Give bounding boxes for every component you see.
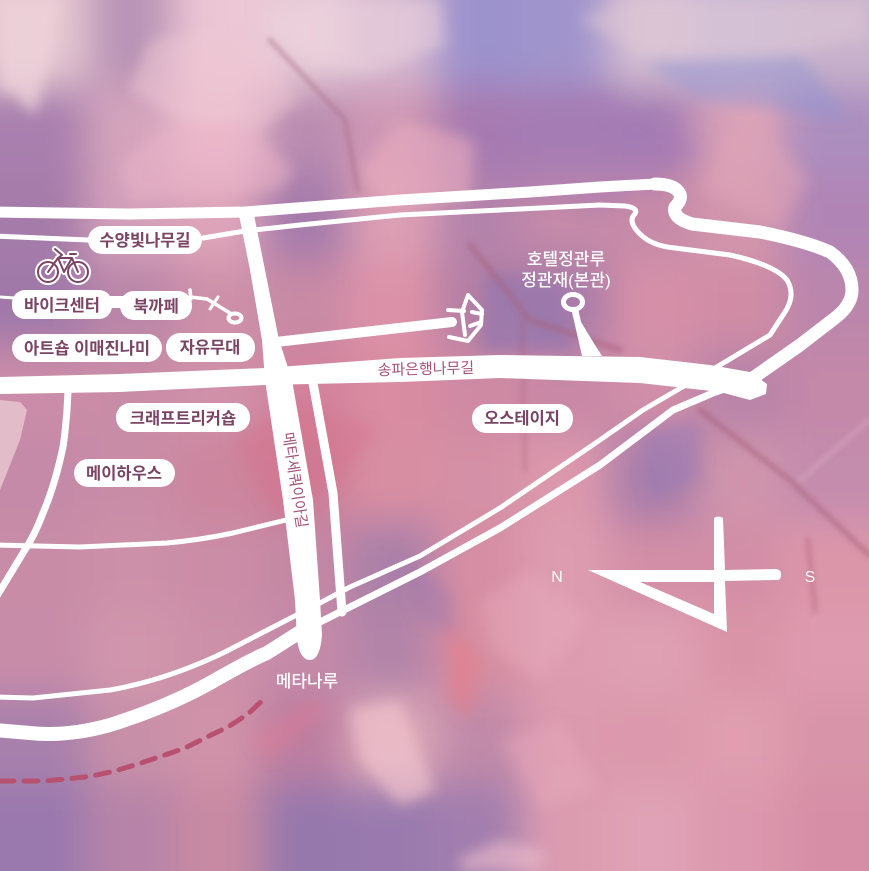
road: thin vertical — [313, 383, 342, 612]
book cafe pin — [190, 290, 242, 322]
road label: songpa: 송파은행나무길 — [377, 360, 474, 379]
road: lower-left horizontal — [0, 520, 286, 547]
label: book cafe: 북까페 — [133, 297, 179, 316]
label: craft liquor shop — [116, 403, 250, 432]
decorative stripe shape — [0, 400, 27, 490]
road label: metasequoia: 메타세쿼이아길 — [279, 431, 310, 529]
label: bike center: 바이크센터 — [24, 296, 100, 315]
label: bike center — [0, 290, 124, 319]
road: metasequoia avenue — [238, 210, 322, 660]
hotel label: 정관재(본관) — [521, 271, 611, 290]
icon: gate — [448, 295, 482, 341]
road: south-west edge — [0, 632, 300, 734]
road: branch to gate — [276, 322, 452, 342]
road: inner loop — [0, 205, 791, 698]
hotel pin — [564, 294, 602, 356]
compass: S — [805, 569, 815, 586]
map roads — [0, 184, 852, 734]
label: may house: 메이하우스 — [86, 464, 162, 483]
label: art shop: 아트숍 이매진나미 — [24, 339, 150, 358]
hotel label: 호텔정관루 — [527, 250, 605, 269]
label: free stage: 자유무대 — [180, 338, 240, 357]
label: craft liquor shop: 크래프트리커숍 — [130, 409, 236, 428]
hotel label — [521, 250, 611, 290]
road: top edge — [0, 184, 655, 214]
road: songpa ginkgo avenue — [0, 355, 767, 400]
label: sooyang path — [88, 226, 202, 254]
label: ostage: 오스테이지 — [484, 409, 560, 428]
label: may house — [74, 459, 175, 487]
label: sooyang path: 수양빛나무길 — [99, 231, 191, 250]
label: book cafe — [120, 291, 192, 320]
road: upper-left path — [0, 236, 88, 240]
label: metanaru: 메타나루 — [276, 672, 338, 691]
road: south-east edge — [300, 380, 750, 632]
road: lower-left curve — [0, 392, 68, 596]
icon: bicycle — [38, 249, 88, 282]
label: art shop — [12, 334, 162, 362]
compass — [551, 516, 815, 632]
road: east loop — [655, 184, 852, 380]
compass: N — [551, 569, 563, 586]
label: ostage — [472, 404, 573, 433]
label: free stage — [166, 333, 255, 362]
dashed ferry route — [0, 698, 265, 781]
